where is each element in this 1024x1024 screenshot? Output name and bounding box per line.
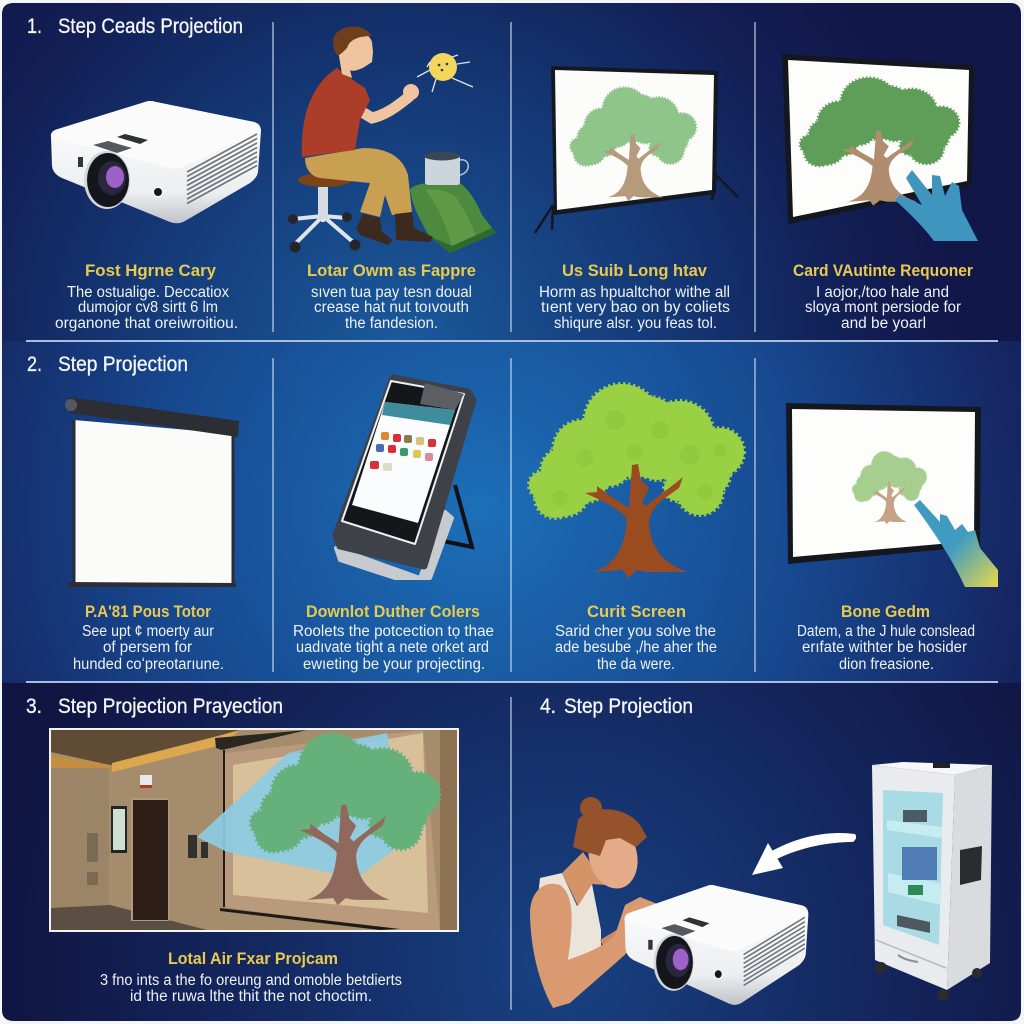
card text: column 3: the da were. bbox=[597, 656, 675, 673]
card text: column 1: Fost Hgrne Cary bbox=[85, 262, 217, 280]
card text: column 2: Downlot Duther Colers bbox=[306, 603, 480, 621]
icon: screen with tree and pointing hand bbox=[782, 54, 978, 241]
panel: step 2 bbox=[27, 353, 998, 673]
heading: step 1: Step Ceads Projection bbox=[58, 15, 243, 38]
card text: step 3 caption bbox=[100, 950, 402, 1005]
heading: step 1: 1. bbox=[27, 15, 42, 38]
card text: column 3 bbox=[539, 262, 730, 332]
card text: column 1: of persem for bbox=[103, 639, 192, 656]
card text: column 2: uadıvate tight a nete orket ard bbox=[296, 639, 489, 656]
icon: wall projector screen bbox=[65, 397, 239, 587]
card text: column 3: tıent very bao on by coliets bbox=[541, 299, 730, 316]
heading: step 2: 2. bbox=[27, 353, 42, 376]
card text: column 2: Lotar Owm as Fappre bbox=[307, 262, 476, 280]
card text: column 4: Bone Gedm bbox=[841, 603, 930, 621]
row 1 background bbox=[2, 3, 1021, 341]
card text: column 2 bbox=[293, 603, 494, 673]
card text: column 2: sıven tua pay tesn doual bbox=[311, 284, 472, 301]
card text: column 3: shiqure alsr. you feas tol. bbox=[554, 315, 717, 332]
icon: large tree bbox=[529, 384, 744, 578]
card text: column 1: The ostualige. Deccatiox bbox=[67, 284, 229, 301]
panel: step 4 bbox=[530, 695, 992, 1008]
icon: projector bbox=[51, 101, 261, 223]
card text: column 4: I aojor,/too hale and bbox=[816, 284, 949, 301]
card text: column 3: Curit Screen bbox=[587, 603, 686, 621]
panel: step 3 bbox=[26, 695, 459, 1005]
heading: step 4: Step Projection bbox=[564, 695, 693, 718]
card text: column 4: Card VAutinte Requoner bbox=[793, 262, 974, 280]
heading: step 3: Step Projection Prayection bbox=[58, 695, 283, 718]
card text: column 1 bbox=[73, 603, 224, 673]
card text: column 2: crease hat nut toıvouth bbox=[314, 299, 469, 316]
card text: step 3 caption: Lotal Air Fxar Projcam bbox=[168, 950, 338, 968]
card text: column 2: the fandesion. bbox=[345, 315, 438, 332]
row 3 background bbox=[2, 683, 1021, 1021]
icon: screen with small tree and hand bbox=[786, 403, 998, 587]
card text: column 4 bbox=[797, 603, 975, 673]
card text: column 1 bbox=[55, 262, 238, 332]
card text: column 1: organone that oreiwroitiou. bbox=[55, 315, 238, 332]
arrow: curved white bbox=[752, 833, 856, 875]
card text: column 1: P.A'81 Pous Totor bbox=[85, 603, 212, 621]
card text: column 1: dumojor cv8 sirtt 6 lm bbox=[78, 299, 218, 316]
card text: column 4: and be yoarl bbox=[841, 315, 926, 332]
card text: column 3: Sarid cher you solve the bbox=[555, 623, 716, 640]
heading: step 4: 4. bbox=[540, 695, 556, 718]
icon: projector on table bbox=[625, 885, 808, 1005]
icon: smartphone on stand bbox=[336, 378, 473, 578]
card text: column 2 bbox=[307, 262, 476, 332]
card text: column 4: sloya mont persiode for bbox=[805, 299, 961, 316]
card text: column 2: ewıeting be your projecting. bbox=[303, 656, 485, 673]
icon: tripod screen with tree bbox=[535, 66, 738, 233]
icon: cabinet bbox=[872, 762, 992, 1001]
card text: step 3 caption: id the ruwa lthe thit the not choctim. bbox=[130, 988, 372, 1005]
card text: column 3: Us Suib Long htav bbox=[562, 262, 708, 280]
card text: step 3 caption: 3 fno ints a the fo oreung and omoble betdierts bbox=[100, 972, 402, 989]
heading: step 2: Step Projection bbox=[58, 353, 188, 376]
heading: step 3: 3. bbox=[26, 695, 42, 718]
row 2 background bbox=[2, 341, 1021, 683]
card text: column 4: erıfate withter be hosider bbox=[802, 639, 967, 656]
card text: column 4 bbox=[793, 262, 974, 332]
photo: projection in a room bbox=[49, 728, 459, 932]
card text: column 1: hunded coʻpreotarıune. bbox=[73, 656, 224, 673]
card text: column 3: ade besube ,/he aher the bbox=[555, 639, 717, 656]
card text: column 2: Roolets the potcection tọ thae bbox=[293, 623, 494, 640]
icon: woman bbox=[530, 797, 660, 1008]
icon: seated person with sun bbox=[288, 26, 496, 253]
panel: step 1 bbox=[27, 15, 978, 332]
card text: column 3: Horm as hpualtchor withe all bbox=[539, 284, 730, 301]
card text: column 4: Datem, a the J hule conslead bbox=[797, 623, 975, 640]
card text: column 4: dion freasione. bbox=[839, 656, 934, 673]
card text: column 3 bbox=[555, 603, 717, 673]
card text: column 1: See upt ¢ moerty aur bbox=[82, 623, 214, 640]
